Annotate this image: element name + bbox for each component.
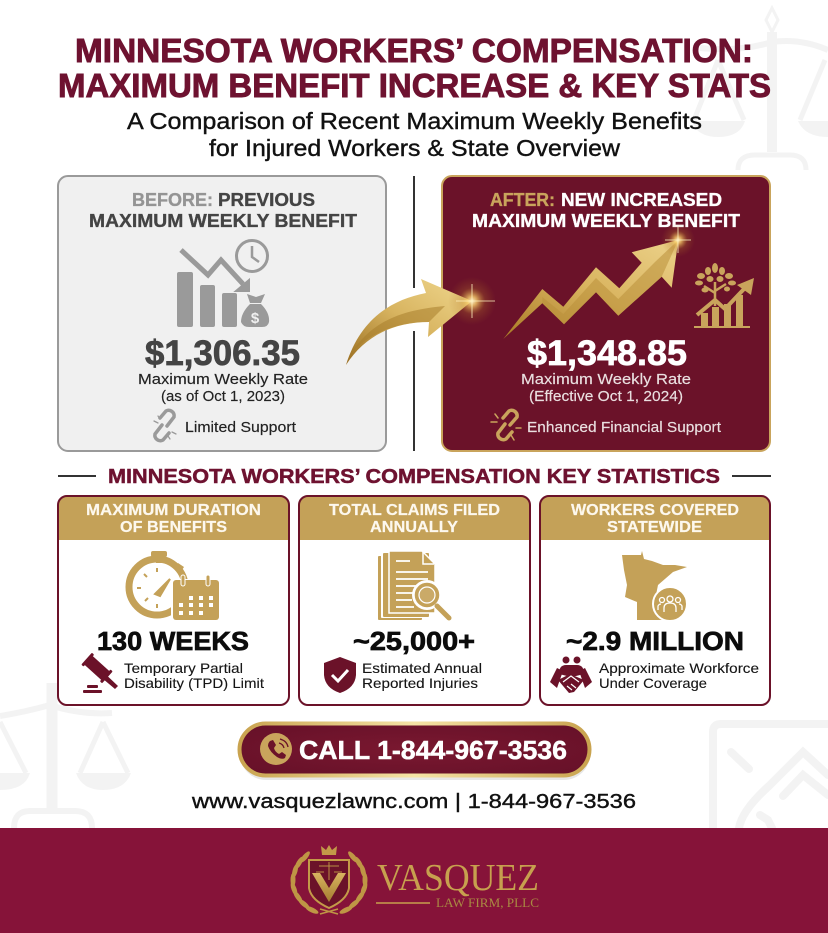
section heading: key statistics: MINNESOTA WORKERS’ COMPENSATION KEY STATISTICS	[108, 466, 720, 488]
after heading: AFTER:	[490, 189, 555, 210]
enhanced support label: Enhanced Financial Support	[527, 420, 721, 436]
after rate caption	[521, 372, 691, 405]
card heading: TOTAL CLAIMS FILED	[329, 502, 500, 519]
after heading	[472, 189, 741, 231]
subtitle: A Comparison of Recent Maximum Weekly Benefits	[127, 108, 702, 134]
icon: stopwatch and calendar	[129, 551, 221, 623]
title: MAXIMUM BENEFIT INCREASE & KEY STATS	[58, 67, 771, 104]
before amount: $1,306.35	[145, 334, 300, 373]
before rate caption: (as of Oct 1, 2023)	[161, 389, 285, 405]
wreath	[289, 850, 369, 915]
panel: after	[442, 176, 770, 451]
before heading: PREVIOUS	[218, 189, 315, 210]
arrow: gold curved arrow from before to after	[346, 277, 496, 365]
panel: before	[58, 176, 386, 451]
stat: claims: ~25,000+	[353, 626, 475, 656]
footer band	[0, 828, 828, 933]
logo wordmark: VASQUEZ	[377, 857, 539, 899]
title: MINNESOTA WORKERS’ COMPENSATION:	[75, 32, 753, 69]
card caption	[124, 660, 264, 691]
icon: broken chain gold	[491, 410, 521, 440]
card heading: MAXIMUM DURATION	[86, 502, 261, 519]
after heading: MAXIMUM WEEKLY BENEFIT	[472, 210, 741, 231]
background watermark: document bottom right	[713, 724, 828, 828]
panel: workers covered	[540, 496, 770, 705]
card heading	[86, 502, 261, 536]
icon: tree growth chart	[694, 263, 754, 327]
card caption: Disability (TPD) Limit	[124, 675, 264, 691]
card caption: Temporary Partial	[124, 660, 243, 676]
call text: CALL 1-844-967-3536	[299, 735, 567, 765]
icon: phone	[260, 733, 292, 765]
panel: maximum duration	[58, 496, 289, 705]
card caption: Approximate Workforce	[599, 660, 759, 676]
card heading: ANNUALLY	[370, 519, 459, 536]
after rate caption: Maximum Weekly Rate	[521, 372, 691, 388]
stat: workers: ~2.9 MILLION	[566, 626, 744, 656]
card heading: STATEWIDE	[607, 519, 702, 536]
before rate caption: Maximum Weekly Rate	[138, 372, 308, 388]
subtitle	[127, 108, 702, 161]
background watermark: scales bottom left	[0, 683, 131, 828]
after rate caption: (Effective Oct 1, 2024)	[529, 389, 683, 405]
limited support label: Limited Support	[185, 420, 296, 436]
card caption: Under Coverage	[599, 675, 707, 691]
title	[58, 32, 771, 104]
card heading: WORKERS COVERED	[571, 502, 739, 519]
divider	[413, 176, 415, 451]
subtitle: for Injured Workers & State Overview	[209, 135, 621, 161]
logo crest	[289, 845, 369, 915]
before heading	[89, 189, 358, 231]
after amount: $1,348.85	[527, 334, 687, 373]
card heading: OF BENEFITS	[120, 519, 227, 536]
before heading: BEFORE:	[132, 189, 213, 210]
icon: rising gold zigzag arrow	[503, 223, 695, 339]
card caption: Estimated Annual	[362, 660, 482, 676]
background watermark: scales top right	[692, 8, 828, 170]
icon: documents and magnifier	[378, 551, 449, 620]
panel: total claims	[299, 496, 530, 705]
icon: falling chart with clock and money bag: $	[251, 310, 260, 327]
icon: Minnesota map with people	[622, 551, 687, 621]
card caption: Reported Injuries	[362, 675, 478, 691]
call button	[240, 724, 590, 780]
stat: 130 weeks: 130 WEEKS	[97, 626, 249, 656]
before heading: MAXIMUM WEEKLY BENEFIT	[89, 210, 358, 231]
icon: shield with check	[324, 657, 356, 693]
card heading	[329, 502, 500, 536]
card caption	[599, 660, 759, 691]
after heading: NEW INCREASED	[561, 189, 722, 210]
icon: broken chain grey	[154, 410, 176, 441]
icon: gavel	[81, 653, 118, 693]
card heading	[571, 502, 739, 536]
icon: falling chart with clock and money bag	[177, 240, 269, 327]
icon: handshake and people	[550, 656, 592, 693]
card caption	[362, 660, 482, 691]
logo wordmark: LAW FIRM, PLLC	[436, 896, 539, 910]
before rate caption	[138, 372, 308, 405]
website and phone: www.vasquezlawnc.com | 1-844-967-3536	[191, 790, 636, 813]
